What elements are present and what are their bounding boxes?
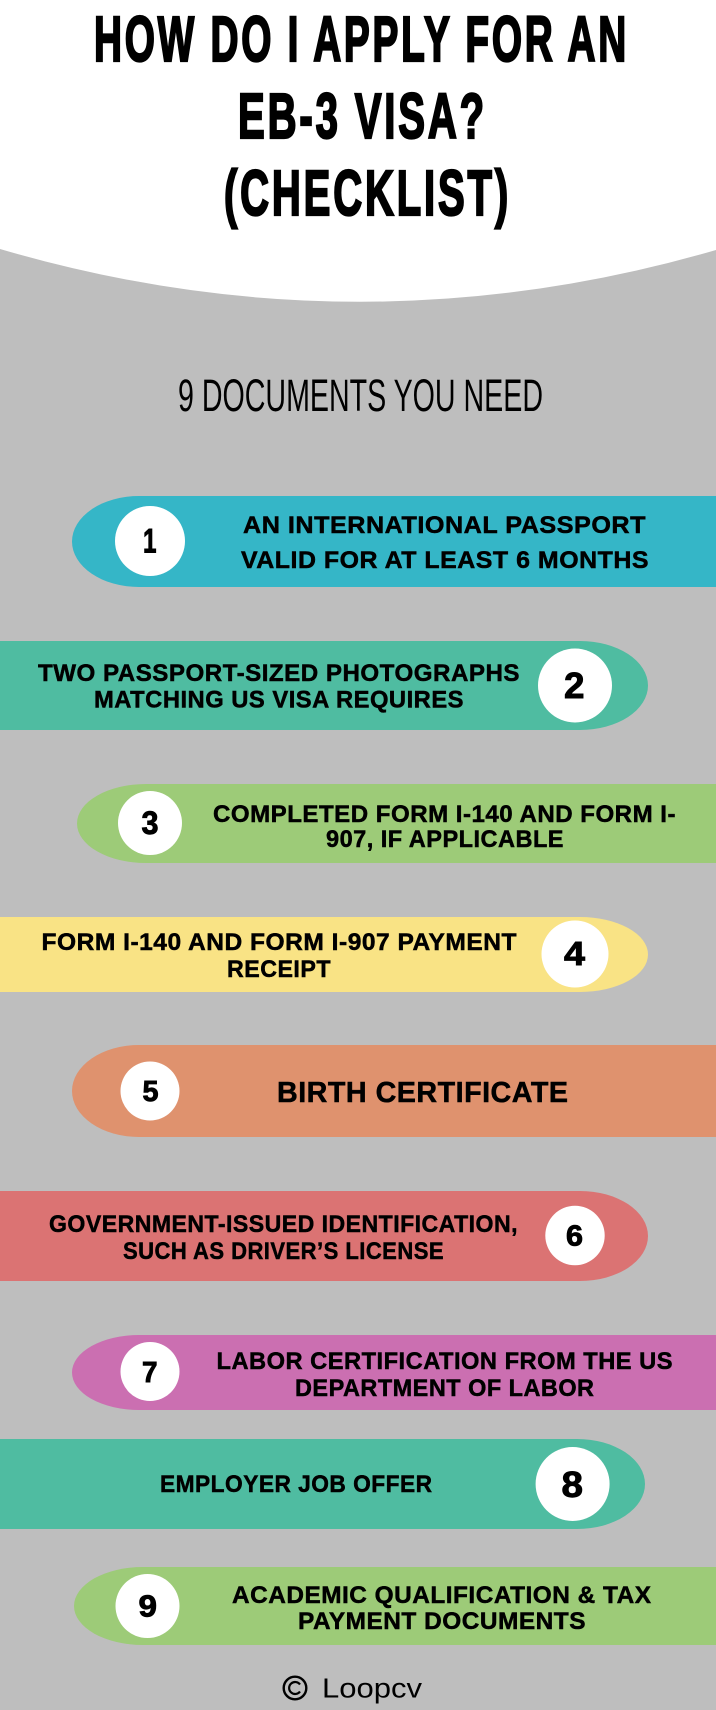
badge 1: 1 [143,522,156,560]
text 9 [232,1582,652,1635]
text 9: PAYMENT DOCUMENTS [298,1608,586,1635]
pill 9 [74,1567,716,1645]
item 1: passport [72,496,716,587]
badge 2: 2 [564,665,584,706]
item 8: employer job offer [0,1439,645,1529]
text 4: RECEIPT [227,956,331,983]
title: (CHECKLIST) [224,157,511,229]
badge 5: 5 [142,1076,158,1108]
text 2 [38,660,520,714]
badge 9 [116,1574,180,1638]
badge 9: 9 [138,1588,157,1624]
pill 2 [0,641,648,730]
text 6: SUCH AS DRIVER’S LICENSE [123,1238,444,1265]
text 3: 907, IF APPLICABLE [326,826,564,853]
badge 3 [118,791,182,855]
pill 3 [77,784,716,863]
pill 1 [72,496,716,587]
text 5: BIRTH CERTIFICATE [277,1077,568,1109]
text 9: ACADEMIC QUALIFICATION & TAX [232,1582,652,1609]
badge 7: 7 [142,1357,158,1389]
item 9: academic qualification [74,1567,716,1645]
badge 5 [120,1062,180,1120]
item 6: government identification [0,1191,648,1281]
badge 6 [545,1206,605,1265]
text 1: VALID FOR AT LEAST 6 MONTHS [241,547,649,574]
text 2: TWO PASSPORT-SIZED PHOTOGRAPHS [38,660,520,687]
text 6: GOVERNMENT-ISSUED IDENTIFICATION, [49,1211,518,1238]
pill 8 [0,1439,645,1529]
text 1 [241,512,649,574]
badge 8 [536,1447,610,1521]
pill 7 [72,1335,716,1410]
footer: Loopcv credit [284,1672,422,1704]
text 7 [216,1348,673,1402]
text 4 [42,929,517,983]
badge 1 [115,506,185,576]
pill 4 [0,917,648,992]
item 7: labor certification [72,1335,716,1410]
badge 8: 8 [562,1464,583,1505]
text 8: EMPLOYER JOB OFFER [160,1471,432,1498]
text 3 [213,801,676,853]
text 2: MATCHING US VISA REQUIRES [94,686,464,714]
text 1: AN INTERNATIONAL PASSPORT [243,512,646,539]
badge 2 [538,648,612,722]
item 5: birth certificate [72,1045,716,1137]
pill 6 [0,1191,648,1281]
title: EB-3 VISA? [238,80,487,152]
text 7: DEPARTMENT OF LABOR [295,1375,594,1402]
text 6 [49,1211,518,1265]
text 7: LABOR CERTIFICATION FROM THE US [216,1348,673,1375]
badge 3: 3 [142,805,158,841]
item 4: payment receipt [0,917,648,992]
brand name: Loopcv [322,1672,422,1704]
badge 4 [542,920,608,988]
badge 6: 6 [566,1220,583,1252]
text 3: COMPLETED FORM I-140 AND FORM I- [213,801,676,828]
pill 5 [72,1045,716,1137]
icon: copyright [284,1677,306,1699]
text 4: FORM I-140 AND FORM I-907 PAYMENT [42,929,517,956]
badge 4: 4 [564,935,586,972]
item 3: form I-140 and I-907 [77,784,716,863]
white curved header [0,0,716,302]
title [94,3,629,229]
item 2: photographs [0,641,648,730]
badge 7 [120,1342,180,1401]
